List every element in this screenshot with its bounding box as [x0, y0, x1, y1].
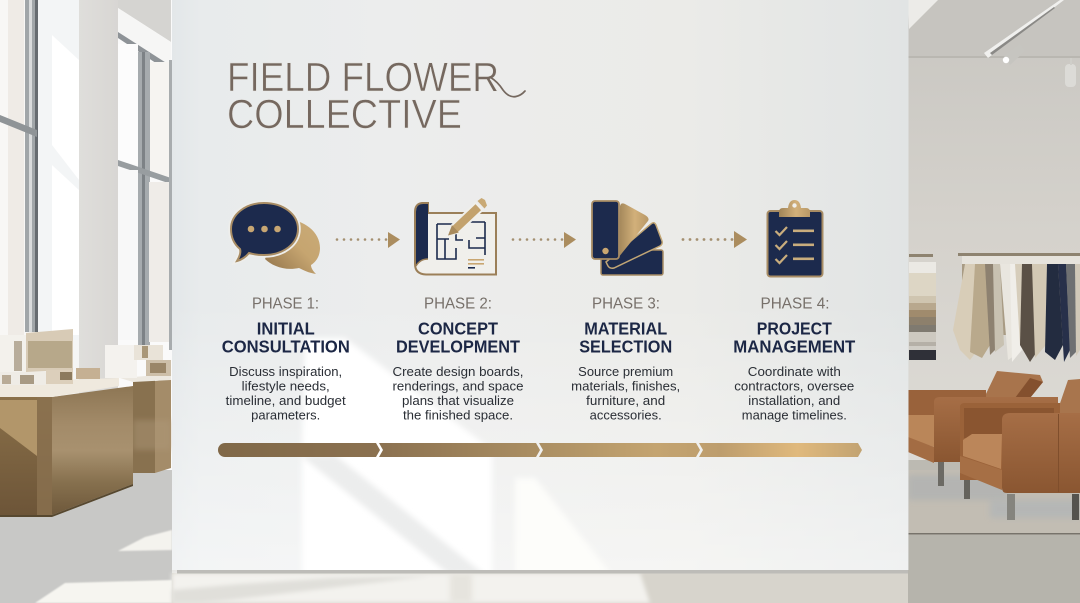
track light	[984, 0, 1076, 87]
ceiling	[908, 0, 1080, 58]
window right	[118, 0, 172, 470]
plinth front	[0, 386, 133, 517]
phase 2 text: DEVELOPMENT	[396, 336, 520, 356]
phase 1 text: parameters.	[251, 408, 320, 422]
arrow: phase 1 to 2	[336, 232, 400, 248]
floor plan	[437, 222, 485, 259]
hanging fabrics	[953, 253, 1080, 362]
phase 1 text: lifestyle needs,	[242, 380, 330, 394]
pillar	[79, 0, 118, 470]
phase 1 text: INITIAL	[257, 318, 315, 338]
icon: material swatches	[592, 201, 663, 275]
phase 2 text	[392, 296, 524, 422]
background: right showroom	[908, 0, 1080, 603]
title: FIELD FLOWER	[227, 54, 499, 100]
phase 4 text: MANAGEMENT	[733, 336, 856, 356]
armchair back	[908, 371, 1058, 486]
model back	[105, 345, 171, 378]
phase 1 text: Discuss inspiration,	[229, 365, 342, 379]
phase 3 text: materials, finishes,	[571, 380, 680, 394]
floor left	[0, 470, 172, 603]
pencil	[448, 198, 487, 236]
background: left window area	[0, 0, 172, 603]
phase 4 text: PHASE 4:	[760, 296, 830, 312]
icon: clipboard	[768, 200, 822, 276]
fabric swatches	[909, 254, 936, 360]
phase 3 text: furniture, and	[586, 394, 665, 408]
title	[227, 54, 525, 137]
phase 2 text: Create design boards,	[392, 365, 524, 379]
plinth back	[120, 374, 171, 473]
rug	[908, 470, 1080, 603]
phase 3 text	[571, 296, 680, 422]
phase 3 text: PHASE 3:	[592, 296, 660, 312]
phase 1 text	[222, 296, 350, 422]
baseboard	[177, 570, 908, 574]
phase 2 text: the finished space.	[403, 408, 513, 422]
phase 4 text: PROJECT	[757, 318, 832, 338]
phase 4 text: installation, and	[748, 394, 840, 408]
phase 2 text: plans that visualize	[402, 394, 514, 408]
phase 1 text: CONSULTATION	[222, 336, 350, 356]
phase 4 text: manage timelines.	[742, 408, 847, 422]
floor strip under wall	[172, 573, 908, 603]
armchair front	[960, 379, 1080, 520]
phase 3 text: Source premium	[578, 365, 673, 379]
phase 1 text: timeline, and budget	[226, 394, 346, 408]
floor right	[908, 460, 1080, 603]
window left	[0, 0, 38, 335]
phase 3 text: SELECTION	[579, 336, 672, 356]
wall reveal	[38, 0, 79, 340]
arrow: phase 3 to 4	[682, 231, 747, 248]
model front	[0, 329, 119, 397]
phase 4 text	[733, 296, 856, 422]
phase 4 text: contractors, oversee	[734, 380, 854, 394]
title: COLLECTIVE	[227, 91, 462, 137]
phase 2 text: PHASE 2:	[424, 296, 492, 312]
phase 1 text: PHASE 1:	[252, 296, 319, 312]
phase 2 text: renderings, and space	[392, 380, 524, 394]
phase 3 text: accessories.	[590, 408, 662, 422]
phase 4 text: Coordinate with	[748, 365, 841, 379]
phase 2 text: CONCEPT	[418, 318, 498, 338]
phase 3 text: MATERIAL	[584, 318, 667, 338]
wall sunlight	[172, 337, 908, 570]
panel: white wall	[172, 0, 908, 575]
arrow: phase 2 to 3	[512, 232, 576, 248]
progress bar	[218, 443, 862, 457]
icon: blueprint	[415, 198, 496, 274]
icon: chat bubbles	[231, 203, 320, 274]
